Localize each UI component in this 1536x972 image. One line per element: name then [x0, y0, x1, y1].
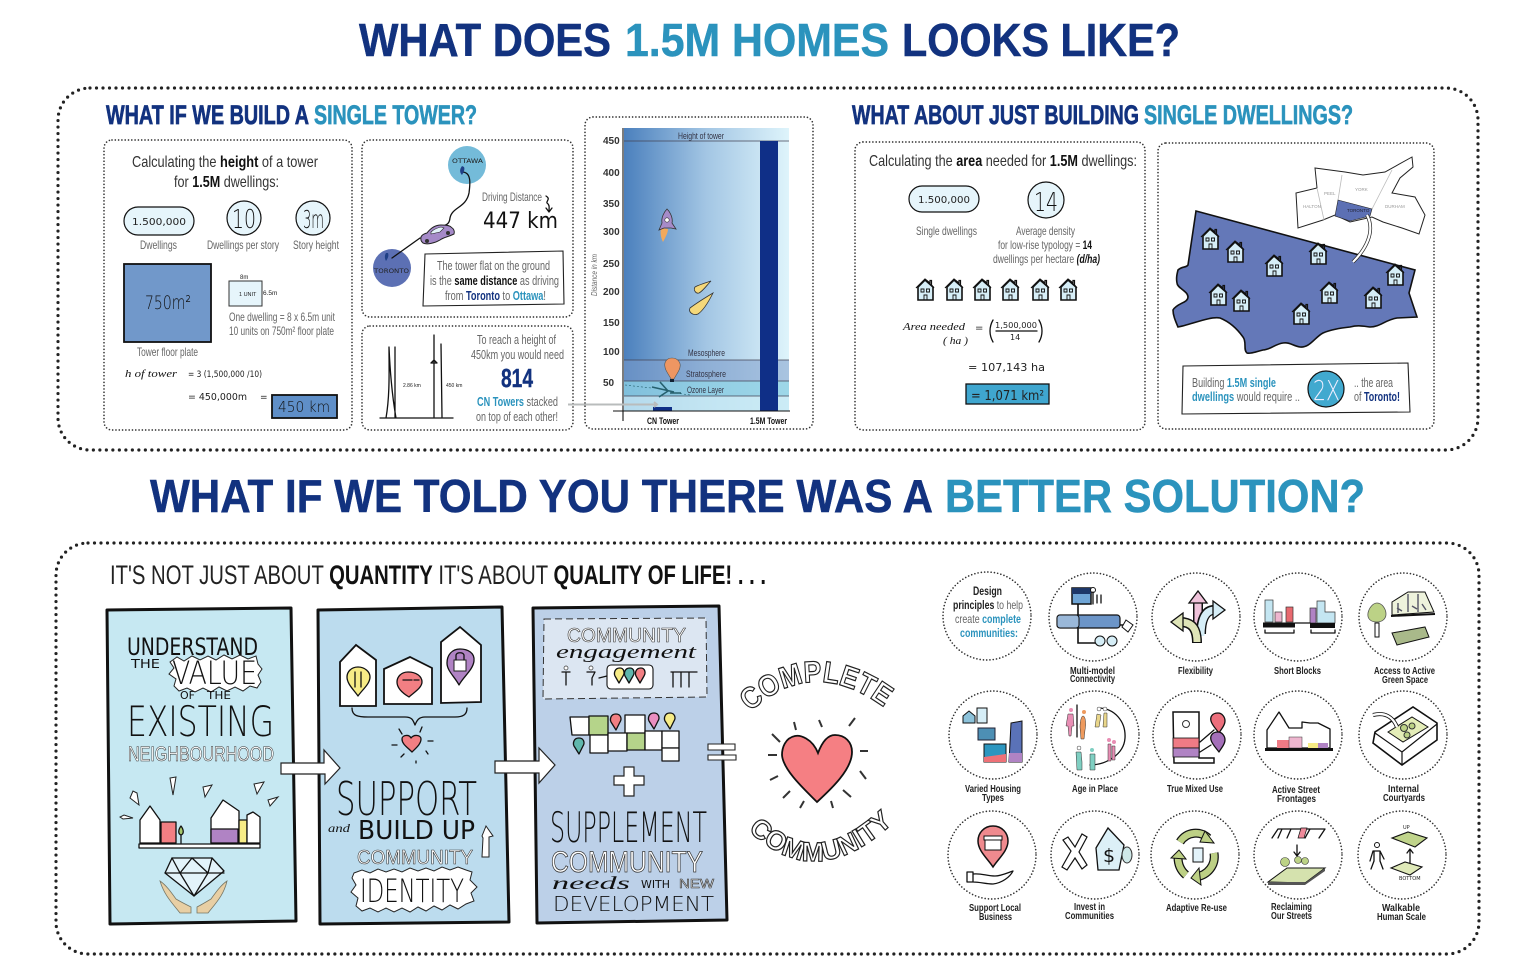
text: 814 CN towers: 450km you would need	[471, 348, 564, 362]
principle: walkable human scale: Walkable	[1382, 902, 1420, 914]
icon: theatre pin	[397, 672, 422, 697]
callout: same distance: is the same distance as driving	[430, 274, 559, 288]
inset map: GTA regions	[1296, 157, 1425, 234]
lettering: understand value: THE	[130, 657, 160, 671]
pill: 1,500,000 dwellings: 1.500,000	[132, 217, 186, 228]
handwritten area equation: Area needed	[902, 321, 966, 333]
inset map: GTA regions: YORK	[1355, 187, 1368, 192]
lettering: understand value: NEIGHBOURHOOD	[128, 743, 274, 766]
circle: 10 dwellings per story: 10	[232, 205, 256, 235]
callout: 2X the area: of Toronto!	[1354, 390, 1400, 404]
sketch: CN tower and stack: 2.86 km	[403, 383, 421, 389]
callout: 2X the area: 2X	[1313, 374, 1340, 407]
text: 814 CN towers	[471, 333, 564, 424]
lettering: understand value: EXISTING	[127, 697, 274, 746]
lettering: support, build up, community identity	[328, 772, 493, 912]
lettering: complete: COMPLETE	[740, 660, 895, 708]
panel: tower height calculation	[104, 140, 352, 430]
handwritten area equation: = 107,143 ha	[968, 362, 1045, 374]
lettering: understand value	[127, 633, 274, 766]
sketch: three community houses	[340, 627, 481, 725]
principle: support local business	[948, 811, 1036, 923]
handwritten area equation: =	[975, 323, 983, 334]
lettering: understand value: UNDERSTAND	[127, 633, 258, 661]
principle: invest in communities: $	[1103, 845, 1115, 867]
principle: active street frontages: Active Street	[1272, 784, 1320, 796]
callout: 2X the area: .. the area	[1354, 376, 1393, 390]
circle: design principles intro: principles to help	[953, 598, 1023, 612]
heading: quantity vs quality: IT'S NOT JUST ABOUT QUANTITY IT'S ABOUT QUALITY OF LIFE! . . .	[110, 560, 766, 590]
principle: adaptive re-use	[1151, 811, 1239, 914]
inset map: GTA regions: TORONTO	[1347, 208, 1370, 213]
floor plate square: Tower floor plate	[137, 345, 198, 359]
principle: internal courtyards: Courtyards	[1383, 792, 1425, 804]
lettering: supplement community needs with new development: DEVELOPMENT	[553, 892, 714, 916]
panel: supplement with new development	[533, 606, 727, 923]
callout: 2X the area: Building 1.5M single	[1192, 376, 1276, 390]
handwritten equation: = 3 (1,500,000 /10)	[188, 370, 262, 380]
lettering: understand value: VALUE	[172, 654, 257, 692]
axis labels: Stratosphere	[686, 369, 726, 380]
panel: support and build up	[318, 607, 509, 924]
principle: walkable human scale: Human Scale	[1377, 911, 1426, 923]
principle: reclaiming our streets	[1254, 811, 1342, 922]
circle: 14 density: 14	[1034, 188, 1058, 218]
panel: height chart	[568, 117, 813, 429]
principle: varied housing types	[949, 691, 1037, 804]
single unit diagram: 6.5m	[263, 290, 277, 297]
heading: single tower: SINGLE TOWER?	[314, 100, 477, 130]
circle: 3m story height: Story height	[293, 238, 339, 252]
principle: multi-model connectivity: Multi-model	[1070, 665, 1115, 677]
connector arrow from CN tower	[568, 402, 657, 407]
title: better solution: WHAT IF WE TOLD YOU THERE WAS A	[150, 470, 933, 522]
lettering: support, build up, community identity: COMMUNITY	[357, 847, 473, 869]
icon: hot air balloon	[665, 358, 680, 382]
circle: 3m story height	[293, 201, 339, 252]
chart: tower height vs atmosphere	[568, 128, 790, 427]
driving distance figure: 447 km	[483, 209, 558, 234]
text: calculating height	[132, 154, 319, 191]
single unit diagram: One dwelling = 8 x 6.5m unit	[229, 310, 335, 324]
inset map: GTA regions: PEEL	[1324, 191, 1336, 196]
axis labels: 250	[603, 259, 620, 270]
bar: 1.5M tower	[760, 141, 778, 411]
handwritten area equation: 14	[1010, 333, 1020, 342]
text: calculating height: Calculating the height of a tower	[132, 154, 319, 171]
circle: design principles intro: communities:	[960, 626, 1018, 640]
handwritten equation: = 450,000m	[188, 392, 247, 403]
axis labels: 400	[603, 168, 620, 179]
icon: plane	[625, 382, 690, 397]
axis labels: 450	[603, 136, 620, 147]
lettering: supplement community needs with new development: WITH	[641, 878, 670, 891]
box: community engagement: engagement	[556, 642, 697, 663]
sketch: CN tower and stack	[380, 335, 462, 418]
route from Toronto to Ottawa	[373, 146, 486, 287]
principle: support local business: Business	[979, 911, 1012, 923]
inset map: GTA regions: DURHAM	[1385, 204, 1405, 209]
pill: 1,500,000 single dwellings: Single dwellings	[916, 224, 977, 238]
axis labels: 150	[603, 318, 620, 329]
pill: 1,500,000 dwellings: Dwellings	[140, 238, 177, 252]
principle: access to active green space	[1359, 573, 1447, 686]
circle: design principles intro: create complete	[955, 612, 1021, 626]
principle: varied housing types: Varied Housing	[965, 783, 1021, 795]
curved arrow from inset to map	[1353, 215, 1370, 262]
handwritten area equation	[902, 320, 1049, 404]
axis labels: Mesosphere	[688, 348, 725, 359]
axis labels: 350	[603, 199, 620, 210]
panel: area calculation	[855, 142, 1145, 430]
pill: 1,500,000 single dwellings: 1.500,000	[918, 195, 970, 206]
principle: internal courtyards	[1359, 691, 1447, 804]
principle: access to active green space: Green Space	[1382, 674, 1428, 686]
icon: shopping pin	[447, 649, 474, 685]
route from Toronto to Ottawa: TORONTO	[373, 267, 409, 275]
single unit diagram: 8m	[240, 275, 248, 281]
floor plate square: 750m²	[145, 292, 191, 314]
icon: comets	[690, 281, 713, 315]
axis labels: 200	[603, 287, 620, 298]
lettering: supplement community needs with new development: NEW	[679, 876, 715, 891]
axis labels: 100	[603, 347, 620, 358]
panel: quality of life	[54, 541, 1481, 956]
callout: same distance: from Toronto to Ottawa!	[445, 289, 546, 303]
lettering: supplement community needs with new development: needs	[552, 873, 630, 893]
box: community engagement: COMMUNITY	[567, 625, 686, 647]
heading: single tower: WHAT IF WE BUILD A	[106, 100, 309, 130]
puzzle pieces with pins	[570, 713, 679, 761]
principle: short blocks: Short Blocks	[1274, 665, 1321, 677]
principle: flexibility: Flexibility	[1178, 665, 1213, 677]
panel: driving distance comparison	[362, 140, 573, 317]
icon: heart	[782, 735, 852, 802]
principle: invest in communities	[1051, 811, 1139, 922]
circle: 14 density	[993, 182, 1100, 266]
axis labels: Ozone Layer	[687, 385, 724, 396]
principle: varied housing types: Types	[982, 792, 1004, 804]
axis labels: 50	[603, 378, 615, 389]
arrow: step one to two	[281, 750, 340, 784]
axis labels: CN Tower	[647, 416, 679, 427]
handwritten area equation: ( ha )	[943, 335, 968, 347]
handwritten area equation: 1,500,000	[995, 321, 1037, 330]
principle: walkable human scale: BOTTOM	[1399, 876, 1421, 882]
handwritten equation	[125, 369, 337, 418]
principle: true mixed use: True Mixed Use	[1167, 783, 1223, 795]
lettering: understand value: THE	[206, 689, 231, 702]
driving distance figure	[482, 190, 558, 234]
principle: support local business: Support Local	[969, 902, 1021, 914]
principle: short blocks	[1254, 573, 1342, 677]
panel: CN towers stacked	[362, 326, 573, 430]
map: Toronto with houses	[1173, 211, 1417, 353]
panel: tower and dwellings scenarios	[58, 88, 1478, 450]
circle: 14 density: Average density	[1016, 224, 1075, 238]
floor plate square	[124, 264, 211, 359]
callout: 2X the area: dwellings would require ..	[1192, 390, 1300, 404]
route from Toronto to Ottawa: OTTAWA	[452, 157, 484, 165]
lettering: supplement community needs with new development	[550, 803, 715, 916]
axis labels	[590, 131, 787, 427]
single unit diagram: 10 units on 750m² floor plate	[229, 324, 334, 338]
lettering: understand value: OF	[180, 689, 195, 702]
pill: 1,500,000 single dwellings	[909, 186, 979, 238]
axis labels: Height of tower	[678, 131, 724, 141]
principle: age in place: Age in Place	[1072, 783, 1118, 795]
heart rays	[768, 718, 868, 808]
icon: plus sign	[614, 767, 644, 796]
text: 814 CN towers: To reach a height of	[477, 333, 556, 347]
principle: walkable human scale: UP	[1403, 825, 1410, 831]
handwritten area equation: = 1,071 km²	[971, 389, 1044, 404]
title: what does 1.5M homes looks like	[359, 14, 1180, 66]
lettering: support, build up, community identity: and	[328, 821, 351, 835]
principle: active street frontages	[1254, 691, 1342, 805]
sketch: neighbourhood buildings	[120, 777, 278, 848]
callout: same distance	[423, 251, 564, 306]
principle: active street frontages: Frontages	[1277, 793, 1316, 805]
title: what does 1.5M homes looks like: 1.5M HOMES	[625, 14, 889, 66]
principle: invest in communities: Invest in	[1074, 901, 1105, 913]
equals sign	[708, 744, 736, 760]
complete community badge	[740, 660, 895, 862]
text: 814 CN towers: on top of each other!	[476, 410, 558, 424]
icon row: six houses	[916, 279, 1077, 300]
circle: 14 density: dwellings per hectare (d/ha)	[993, 252, 1100, 266]
heading: single dwellings: SINGLE DWELLINGS?	[1144, 100, 1353, 130]
lettering: support, build up, community identity: BUILD UP	[358, 816, 475, 846]
principle: walkable human scale	[1358, 811, 1446, 923]
single unit diagram: 1 UNIT	[239, 292, 257, 298]
single unit diagram	[229, 275, 335, 338]
pill: 1,500,000 dwellings	[124, 207, 194, 252]
panel: understand existing neighbourhood	[107, 608, 296, 924]
principle: access to active green space: Access to Active	[1374, 665, 1435, 677]
principle: adaptive re-use: Adaptive Re-use	[1166, 902, 1227, 914]
bar: CN tower	[653, 407, 672, 411]
principle: internal courtyards: Internal	[1388, 783, 1419, 795]
inset map: GTA regions: HALTON	[1303, 204, 1321, 209]
axis labels: Distance in km	[590, 254, 599, 296]
principle: age in place	[1051, 691, 1139, 795]
icon: restaurant pin	[347, 667, 370, 696]
principle: reclaiming our streets: Reclaiming	[1271, 901, 1312, 913]
heading: single dwellings: WHAT ABOUT JUST BUILDING	[852, 100, 1139, 130]
circle: design principles intro: Design	[973, 584, 1002, 598]
icon: heart with rays	[392, 727, 433, 763]
principle: flexibility	[1152, 573, 1240, 677]
sketch: CN tower and stack: 450 km	[446, 383, 462, 389]
title: better solution: BETTER SOLUTION?	[945, 470, 1365, 522]
axis labels: 300	[603, 227, 620, 238]
title: what does 1.5M homes looks like: WHAT DOES	[359, 14, 611, 66]
arrow: step two to three	[495, 748, 555, 783]
principle: true mixed use	[1153, 691, 1241, 795]
text: calculating area: Calculating the area needed for 1.5M dwellings:	[869, 153, 1137, 170]
text: calculating height: for 1.5M dwellings:	[174, 174, 279, 191]
callout: same distance: The tower flat on the ground	[437, 259, 550, 273]
lettering: support, build up, community identity: SUPPORT	[336, 772, 477, 826]
principle: invest in communities: Communities	[1065, 910, 1114, 922]
principle: multi-model connectivity: Connectivity	[1070, 673, 1115, 685]
title: what does 1.5M homes looks like: LOOKS LIKE?	[902, 14, 1180, 66]
icon: car	[421, 225, 454, 244]
text: 814 CN towers: CN Towers stacked	[477, 395, 558, 409]
circle: 10 dwellings per story	[207, 201, 279, 252]
principle: multi-model connectivity	[1049, 573, 1137, 685]
lettering: supplement community needs with new development: SUPPLEMENT	[550, 803, 707, 852]
handwritten equation: 450 km	[278, 398, 330, 416]
handwritten equation: =	[260, 393, 268, 403]
lettering: community: COMMUNITY	[751, 808, 889, 862]
box: community engagement	[543, 618, 707, 699]
lettering: support, build up, community identity: IDENTITY	[360, 872, 464, 910]
lettering: supplement community needs with new development: COMMUNITY	[551, 846, 703, 879]
axis labels: 1.5M Tower	[750, 416, 787, 427]
icon: diamond in hands	[160, 858, 227, 913]
panel: Toronto map comparison	[1158, 143, 1434, 429]
driving distance figure: Driving Distance	[482, 190, 542, 204]
circle: 3m story height: 3m	[303, 205, 324, 234]
circle: 10 dwellings per story: Dwellings per story	[207, 238, 279, 252]
circle: design principles intro	[943, 572, 1031, 660]
handwritten equation: h of tower	[125, 369, 177, 380]
circle: 14 density: for low-rise typology = 14	[998, 238, 1092, 252]
principle: reclaiming our streets: Our Streets	[1271, 910, 1312, 922]
design principles grid	[943, 572, 1447, 923]
icon: rocket	[659, 209, 676, 242]
callout: 2X the area	[1182, 363, 1410, 414]
text: 814 CN towers: 814	[501, 363, 533, 393]
